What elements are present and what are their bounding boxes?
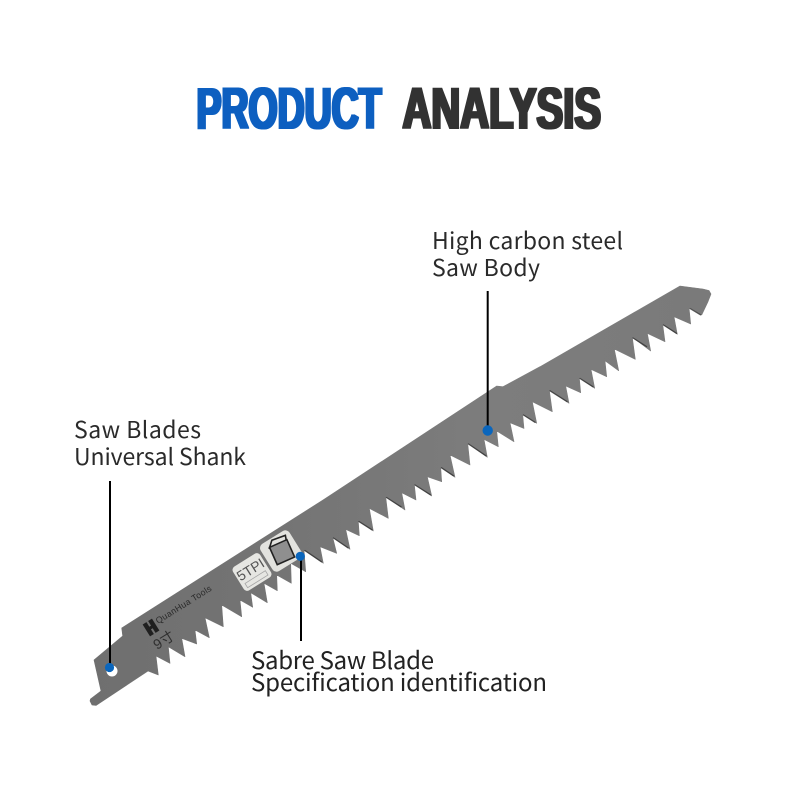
size mark: 9寸 [150,627,177,653]
saw blade [90,286,711,706]
marker dot [482,425,493,436]
callout text: specification: Specification identification [251,663,547,698]
callout: specification [251,552,547,698]
tooth shading [305,308,700,562]
title [196,76,601,142]
hole in shank [106,666,118,676]
title word: PRODUCT: PRODUCT [196,76,382,142]
title word: ANALYSIS: ANALYSIS [402,76,601,142]
marker dot [105,663,114,672]
leader line [300,556,302,641]
blade body [90,286,711,706]
5TPI label [231,552,273,592]
5TPI label: 5TPI [234,555,267,584]
logo mark [143,619,159,636]
callout: shank [74,411,246,672]
leader line [487,291,489,430]
material icon label [258,528,304,574]
callout text: shank: Saw Blades [74,411,201,445]
leader line [109,481,111,667]
brand text: QuanHua Tools [154,583,214,626]
callout: saw body [432,222,628,436]
callout text: saw body: High carbon steel [432,222,623,256]
callout text: specification: Sabre Saw Blade [251,641,434,676]
callout text: shank: Universal Shank [74,438,246,472]
callout text: saw body: Saw Body [432,249,540,283]
marker dot [296,552,305,561]
